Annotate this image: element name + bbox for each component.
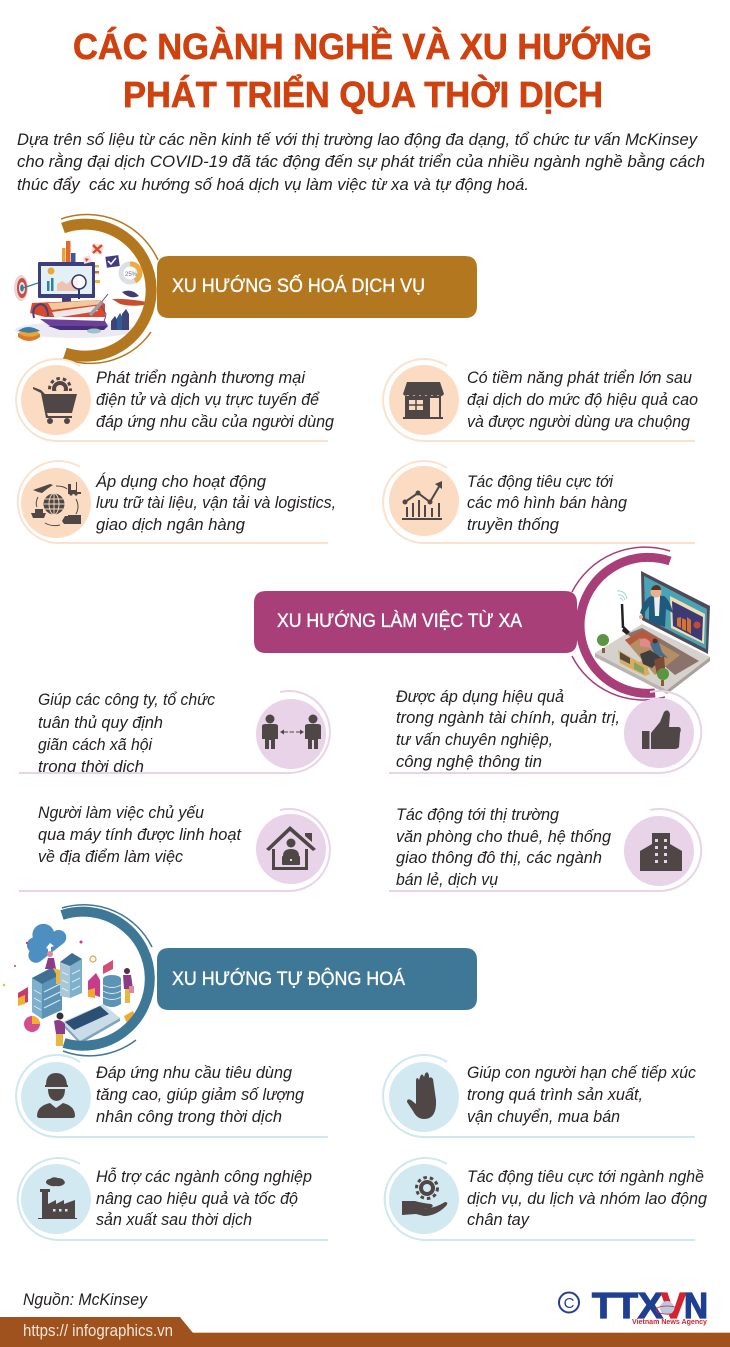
item text: Có tiềm năng phát triển lớn sau — [467, 368, 693, 387]
item text: trong quá trình sản xuất, — [467, 1085, 643, 1104]
logo: TTXVN: Vietnam News Agency — [632, 1317, 708, 1326]
icon: office building — [640, 833, 682, 871]
source: Nguồn: McKinsey — [23, 1290, 148, 1309]
icon: globe and transport — [31, 482, 81, 526]
item text: Giúp các công ty, tổ chức — [38, 690, 215, 709]
item: manual labour impact — [385, 1158, 708, 1240]
item text: tuân thủ quy định — [38, 713, 163, 732]
item text: lưu trữ tài liệu, vận tải và logistics, — [96, 493, 336, 512]
item text: truyền thống — [467, 515, 560, 534]
item text: vận chuyển, mua bán — [467, 1107, 620, 1126]
item text: Phát triển ngành thương mại — [96, 368, 306, 387]
illustration: laptop video meeting — [595, 571, 710, 694]
item text: trong ngành tài chính, quản trị, — [396, 708, 620, 727]
section heading: XU HƯỚNG SỐ HOÁ DỊCH VỤ — [172, 275, 425, 297]
item text — [467, 368, 698, 431]
section heading: XU HƯỚNG LÀM VIỆC TỪ XA — [277, 610, 522, 632]
logo: TTXVN: C — [564, 1295, 575, 1312]
item text: trong thời dịch — [38, 757, 144, 776]
item text: tư vấn chuyên nghiệp, — [396, 730, 553, 749]
item: negative impact on retail — [383, 461, 695, 543]
item text: qua máy tính được linh hoạt — [38, 825, 242, 844]
section: digitalisation — [14, 215, 477, 363]
arc decoration — [61, 215, 158, 363]
item: applied effectively — [389, 687, 701, 773]
item text: bán lẻ, dịch vụ — [396, 870, 498, 889]
item text: nhân công trong thời dịch — [96, 1107, 282, 1126]
header bar — [254, 591, 577, 653]
intro text: Dựa trên số liệu từ các nền kinh tế với thị trường lao động đa dạng, tổ chức tư vấn McKinsey — [17, 130, 698, 149]
item text: tăng cao, giúp giảm số lượng — [96, 1085, 305, 1104]
item text: văn phòng cho thuê, hệ thống — [396, 827, 612, 846]
item text — [95, 472, 336, 534]
item text: giao dịch ngân hàng — [96, 515, 246, 534]
item: logistics — [18, 461, 336, 543]
item text: chân tay — [467, 1210, 530, 1229]
item text — [396, 687, 620, 771]
item text: giãn cách xã hội — [38, 735, 153, 754]
item text: và được người dùng ưa chuộng — [467, 412, 691, 431]
illustration: digital services — [14, 241, 152, 341]
title: PHÁT TRIỂN QUA THỜI DỊCH — [123, 73, 603, 115]
section heading: XU HƯỚNG TỰ ĐỘNG HOÁ — [172, 968, 405, 990]
icon: shopping cart and gear — [33, 378, 77, 424]
item text: Người làm việc chủ yếu — [38, 803, 204, 822]
logo: TTXVN: TTX — [592, 1285, 663, 1326]
item text — [467, 1063, 696, 1126]
item: industry efficiency — [18, 1158, 328, 1240]
section: remote work — [254, 547, 710, 700]
intro text — [17, 130, 705, 194]
item: office and transport impact — [389, 805, 701, 891]
item text: Tác động tới thị trường — [396, 805, 560, 824]
intro text: cho rằng đại dịch COVID-19 đã tác động đến sự phát triển của nhiều ngành nghề bằng cách — [17, 152, 705, 171]
item: e-commerce — [16, 359, 335, 441]
item text: các mô hình bán hàng — [467, 493, 628, 512]
item text — [96, 1063, 305, 1126]
item text: sản xuất sau thời dịch — [96, 1210, 252, 1229]
item: social distancing — [19, 690, 330, 782]
item text — [38, 690, 215, 776]
item text — [96, 1167, 312, 1229]
section: automation — [3, 905, 477, 1056]
icon: thumbs up — [642, 710, 681, 749]
item text — [396, 805, 612, 889]
icon: two people with distance arrow — [262, 714, 321, 749]
item text: điện tử và dịch vụ trực tuyến để — [96, 390, 320, 409]
item text: công nghệ thông tin — [396, 752, 542, 771]
header bar — [157, 256, 477, 318]
icon: worker with helmet — [37, 1073, 75, 1118]
item text: về địa điểm làm việc — [38, 847, 183, 866]
footer url: https:// infographics.vn — [23, 1321, 173, 1340]
item text — [467, 472, 628, 534]
item text — [38, 803, 242, 866]
title: CÁC NGÀNH NGHỀ VÀ XU HƯỚNG — [73, 25, 652, 67]
icon: store — [403, 382, 444, 419]
icon: person working at home — [266, 826, 316, 870]
logo: TTXVN: V — [661, 1285, 686, 1326]
item: reducing labour — [16, 1055, 328, 1137]
item: limiting contact — [383, 1055, 696, 1137]
item text: dịch vụ, du lịch và nhóm lao động — [467, 1189, 708, 1208]
arc decoration — [62, 905, 152, 1056]
illustration: digital services: 25% — [125, 272, 138, 278]
header bar — [157, 948, 477, 1010]
icon: rising chart — [402, 481, 442, 520]
footer bar — [0, 1317, 730, 1347]
item: growth potential — [383, 359, 698, 441]
icon: factory — [38, 1177, 77, 1219]
item text — [96, 368, 335, 431]
item text: nâng cao hiệu quả và tốc độ — [96, 1189, 298, 1208]
item text: Được áp dụng hiệu quả — [396, 687, 564, 706]
illustration: servers and cloud — [3, 915, 136, 1046]
item text: giao thông đô thị, các ngành — [396, 848, 602, 867]
intro text: thúc đẩy các xu hướng số hoá dịch vụ làm việc từ xa và tự động hoá. — [17, 175, 529, 194]
logo: TTXVN — [559, 1285, 708, 1326]
item text: Giúp con người hạn chế tiếp xúc — [467, 1063, 696, 1082]
logo: TTXVN: N — [684, 1285, 708, 1326]
item: flexible location — [19, 803, 330, 891]
item text: Đáp ứng nhu cầu tiêu dùng — [96, 1063, 293, 1082]
item text: đại dịch do mức độ hiệu quả cao — [467, 390, 698, 409]
item text: Hỗ trợ các ngành công nghiệp — [96, 1167, 312, 1186]
item text — [467, 1167, 708, 1229]
title — [73, 25, 652, 115]
item text: Áp dụng cho hoạt động — [95, 472, 267, 491]
icon: gear over hand — [402, 1178, 447, 1216]
arc decoration — [572, 547, 670, 700]
icon: raised hand — [407, 1072, 436, 1119]
item text: Tác động tiêu cực tới — [467, 472, 614, 491]
item text: Tác động tiêu cực tới ngành nghề — [467, 1167, 704, 1186]
item text: đáp ứng nhu cầu của người dùng — [96, 412, 335, 431]
